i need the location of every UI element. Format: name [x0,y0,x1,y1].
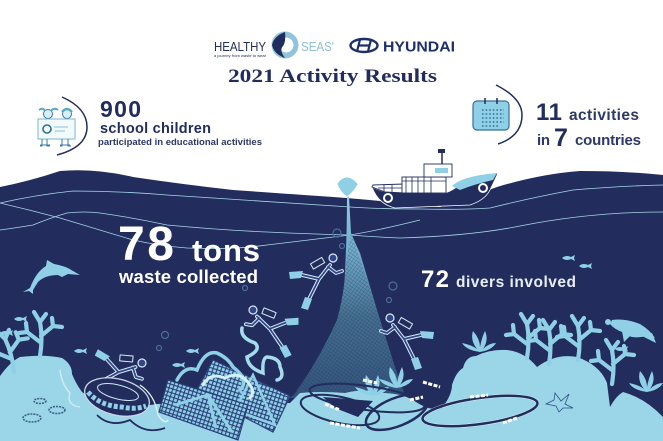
waste: tyre and netting [60,370,168,430]
diver: centre left [244,300,304,363]
label: activities: activities [569,107,639,124]
sea [0,170,663,441]
logo: Healthy Seas: SEAS' [301,39,334,54]
number 72: 72 [421,266,449,293]
label: school children: school children [100,121,211,137]
label: divers involved: divers involved [456,274,576,291]
logo: Healthy Seas: HEALTHY [214,39,266,54]
label: tons: tons [192,233,260,268]
label: in: in [537,132,550,149]
icon: turtle [605,319,656,343]
divers [76,254,434,411]
arc [496,85,522,144]
logo: Healthy Seas: a journey from waste to wear [214,54,267,58]
bubbles [156,229,397,350]
waste: net panels [159,360,290,440]
logo: Hyundai [350,38,455,56]
seabed [0,350,663,441]
ghost net rings [298,378,539,437]
corals left [0,312,62,377]
number 11: 11 [536,99,562,126]
icon: children with sign [38,109,75,146]
net [290,177,406,398]
icon: crabs [23,398,65,422]
number 900: 900 [100,96,141,122]
icon: calendar [473,98,509,130]
label: countries: countries [575,132,641,149]
diver: right [381,314,434,370]
stat: activities [473,85,641,152]
waste: ropes [177,328,282,398]
number 7: 7 [554,124,568,152]
stat: divers [421,266,576,293]
arc [57,97,87,155]
diver: over tyre [76,334,152,411]
diver: top net [289,254,342,310]
label: participated: participated in educational activities [98,137,262,148]
wave lines [0,185,663,249]
ship [372,149,498,208]
net bottom over floor [323,397,373,417]
logo: Hyundai: HYUNDAI [383,38,455,56]
logo: Healthy Seas [214,32,334,58]
icon: dolphin [23,260,80,294]
icon: starfish [546,393,573,412]
buoy [337,177,358,197]
number 78: 78 [118,218,174,271]
corals right [355,314,663,396]
title: 2021 Activity Results [228,66,437,87]
fish [0,255,628,368]
stat: tons [118,218,260,287]
stat: school children [38,96,262,155]
label: waste collected: waste collected [118,266,258,287]
